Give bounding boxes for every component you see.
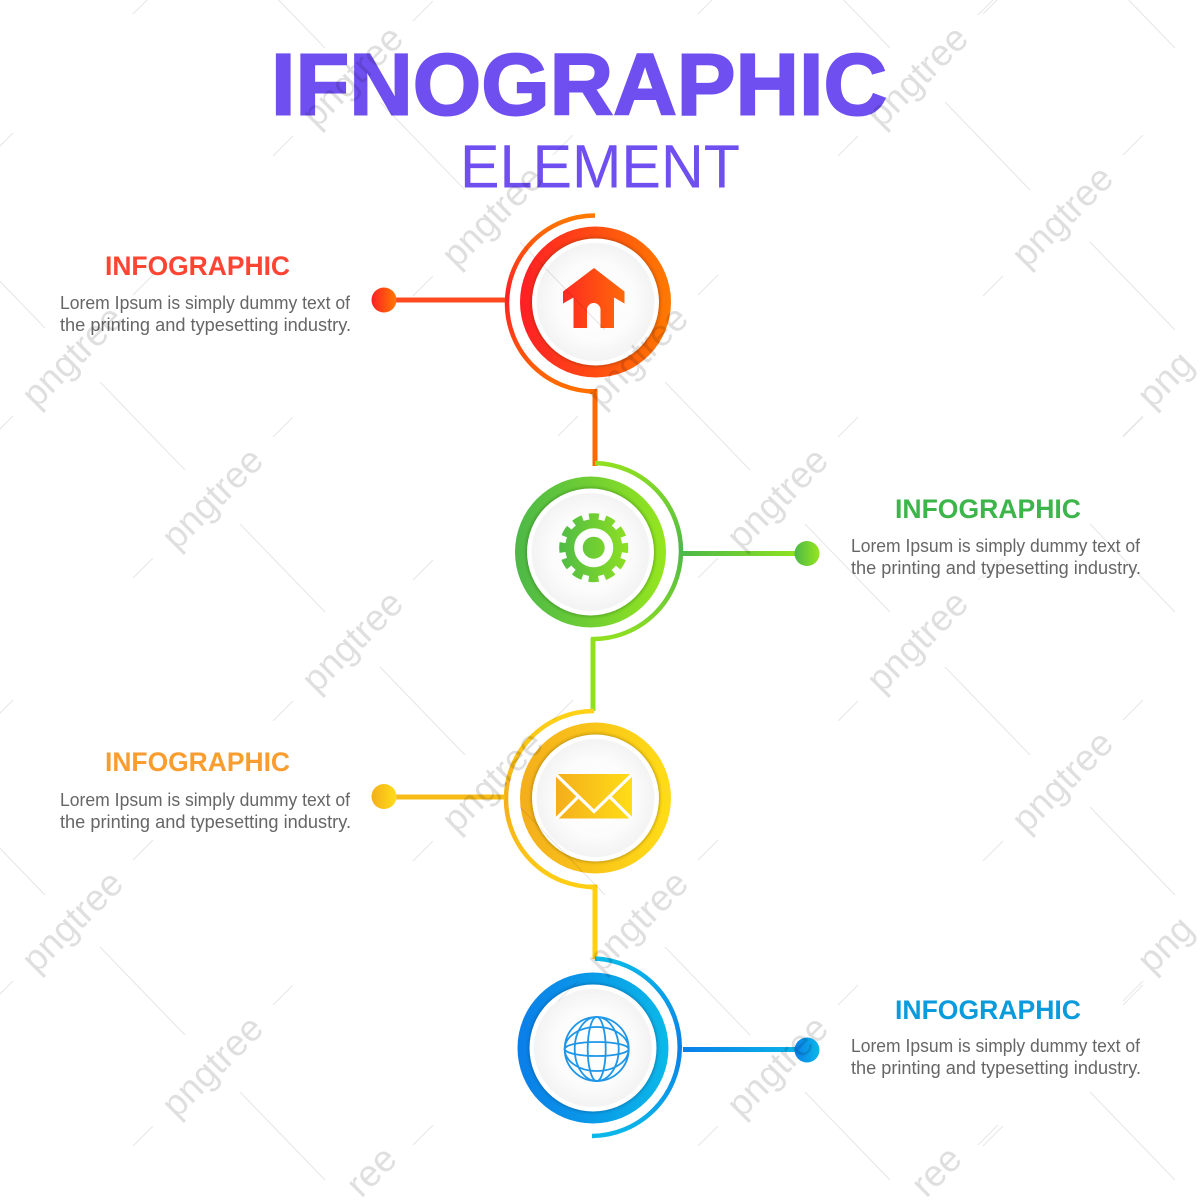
subtitle: ELEMENT bbox=[460, 132, 740, 200]
watermark overlay: pngtree bbox=[293, 17, 411, 135]
watermark overlay: pngtree bbox=[13, 297, 131, 415]
watermark overlay: png bbox=[1129, 908, 1200, 980]
step 3 text: the printing and typesetting industry. bbox=[60, 812, 351, 832]
step 1: home node bbox=[372, 216, 671, 466]
icon: house bbox=[563, 268, 624, 328]
step 3 text bbox=[60, 747, 351, 832]
watermark overlay: pngtree bbox=[433, 157, 551, 275]
watermark overlay: pngtree bbox=[293, 582, 411, 700]
watermark overlay: pngtree bbox=[578, 862, 696, 980]
step 2: gear node bbox=[515, 463, 820, 711]
step 2 text: INFOGRAPHIC bbox=[895, 494, 1081, 524]
icon: globe bbox=[565, 1017, 629, 1081]
step 4 text: the printing and typesetting industry. bbox=[851, 1058, 1141, 1078]
step 4 text: Lorem Ipsum is simply dummy text of bbox=[851, 1036, 1141, 1056]
watermark overlay: pngtree bbox=[153, 439, 271, 557]
step 1 text: INFOGRAPHIC bbox=[105, 251, 290, 281]
step 4: globe node bbox=[518, 958, 820, 1136]
watermark overlay: pngtree bbox=[1003, 157, 1121, 275]
watermark overlay: pngtree bbox=[718, 1007, 836, 1125]
watermark overlay: pngtree bbox=[858, 17, 976, 135]
step 4 text bbox=[851, 995, 1141, 1078]
title: IFNOGRAPHIC bbox=[271, 36, 887, 134]
watermark overlay: pngtree bbox=[858, 582, 976, 700]
step 3: mail node bbox=[372, 711, 671, 959]
watermark overlay: pngtree bbox=[13, 862, 131, 980]
watermark overlay: pngtree bbox=[578, 297, 696, 415]
watermark overlay: pngtree bbox=[718, 439, 836, 557]
icon: envelope bbox=[556, 774, 632, 819]
step 1 text: the printing and typesetting industry. bbox=[60, 315, 351, 335]
icon: gear bbox=[563, 517, 624, 578]
watermark overlay: pngtree bbox=[1003, 722, 1121, 840]
step 3 text: Lorem Ipsum is simply dummy text of bbox=[60, 790, 351, 810]
step 3 text: INFOGRAPHIC bbox=[105, 747, 290, 777]
step 1 text bbox=[60, 251, 351, 335]
watermark overlay: pngtree bbox=[153, 1007, 271, 1125]
watermark overlay: pngtree bbox=[433, 722, 551, 840]
step 2 text: the printing and typesetting industry. bbox=[851, 558, 1141, 578]
step 2 text: Lorem Ipsum is simply dummy text of bbox=[851, 536, 1141, 556]
step 2 text bbox=[851, 494, 1141, 578]
step 4 text: INFOGRAPHIC bbox=[895, 995, 1081, 1025]
step 1 text: Lorem Ipsum is simply dummy text of bbox=[60, 293, 351, 313]
watermark overlay: png bbox=[1129, 343, 1200, 415]
